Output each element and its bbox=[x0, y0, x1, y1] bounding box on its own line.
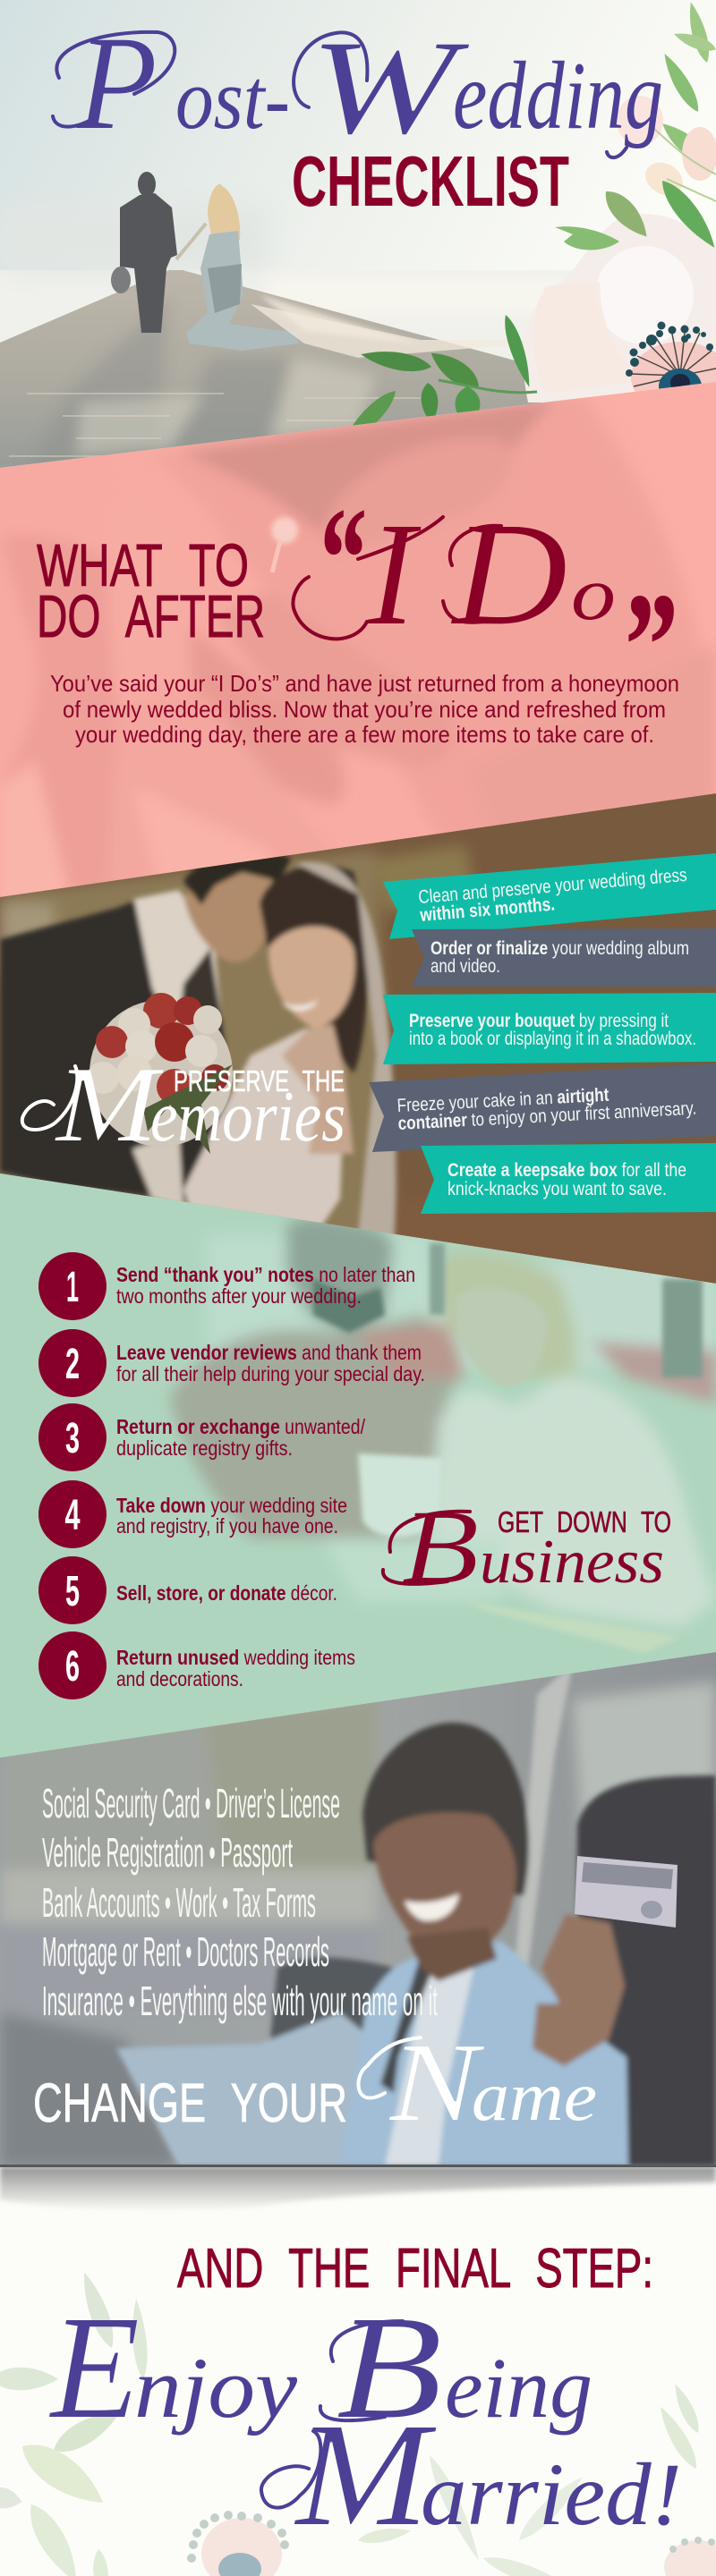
item 4: and registry, if you have one. bbox=[116, 1514, 338, 1538]
ribbon 3: Preserve your bouquet by pressing it bbox=[409, 1011, 669, 1031]
item 4: 4 bbox=[64, 1492, 81, 1539]
title: Post-Wedding bbox=[51, 30, 661, 159]
heading: get down to business: B bbox=[401, 1488, 480, 1606]
groom silhouette bbox=[111, 172, 177, 333]
item 4: Take down your wedding site bbox=[116, 1494, 347, 1517]
id card bbox=[575, 1856, 678, 1928]
heading: I Do script: I bbox=[366, 492, 422, 656]
item 6 bbox=[38, 1631, 355, 1699]
item 5: 5 bbox=[65, 1568, 80, 1615]
heading: get down to business bbox=[381, 1510, 670, 1586]
heading: change your name bbox=[35, 2036, 596, 2123]
checklist items bbox=[38, 1252, 425, 1699]
list of documents: Vehicle Registration • Passport bbox=[42, 1829, 293, 1876]
heading: preserve the memories: PRESERVE THE bbox=[174, 1064, 345, 1097]
closing script: enjoy being married: B bbox=[336, 2285, 443, 2449]
closing script: enjoy being married bbox=[48, 2285, 682, 2556]
heading: I Do script: o bbox=[571, 552, 616, 636]
heading: preserve the memories bbox=[20, 1064, 344, 1141]
heading: what to do after: WHAT TO bbox=[37, 532, 249, 599]
ribbon 3 bbox=[383, 993, 716, 1064]
closing script: enjoy being married: eing bbox=[445, 2340, 592, 2436]
heading: preserve the memories: emories bbox=[150, 1078, 345, 1157]
heading: change your name: N bbox=[388, 2021, 486, 2145]
ribbon 4 bbox=[369, 1063, 716, 1152]
bouquet bbox=[87, 993, 233, 1154]
closing script: enjoy being married: E bbox=[48, 2285, 141, 2449]
icon: anemone flower bbox=[626, 322, 716, 392]
panel: what to do after I do bbox=[0, 376, 716, 912]
couple at table photo bbox=[170, 1217, 716, 1747]
item 3 bbox=[38, 1403, 366, 1471]
item 3: Return or exchange unwanted/ bbox=[116, 1415, 366, 1438]
item 1: 1 bbox=[66, 1264, 79, 1311]
title: Post-Wedding: W bbox=[309, 13, 471, 162]
panel: change your name bbox=[0, 1646, 716, 2174]
item 2 bbox=[38, 1329, 425, 1397]
closing script: enjoy being married: arried! bbox=[421, 2445, 682, 2544]
item 2: Leave vendor reviews and thank them bbox=[116, 1341, 422, 1364]
ribbon 5: Create a keepsake box for all the bbox=[448, 1160, 686, 1181]
item 6: and decorations. bbox=[116, 1667, 243, 1690]
item 4 bbox=[38, 1480, 347, 1548]
ribbon 2: Order or finalize your wedding album bbox=[430, 938, 689, 959]
panel: get down to business bbox=[0, 1163, 716, 1771]
couple photo bbox=[0, 845, 716, 1288]
item 1: two months after your wedding. bbox=[116, 1284, 362, 1308]
panel: preserve the memories bbox=[0, 787, 716, 1288]
intro paragraph: of newly wedded bliss. Now that you’re nice and refreshed from bbox=[63, 696, 666, 723]
large pale flower bbox=[523, 214, 716, 402]
intro paragraph bbox=[50, 670, 679, 748]
pier walkway bbox=[0, 270, 567, 468]
pale anemone flowers bbox=[187, 2511, 716, 2576]
list of documents: Bank Accounts • Work • Tax Forms bbox=[42, 1879, 316, 1926]
ribbon 1 bbox=[383, 853, 716, 939]
item 1: Send “thank you” notes no later than bbox=[116, 1263, 415, 1286]
heading: I Do script bbox=[291, 510, 674, 642]
panel: beach pier photo header bbox=[0, 0, 716, 483]
closing script: enjoy being married: M bbox=[294, 2393, 438, 2556]
item 6: Return unused wedding items bbox=[116, 1646, 355, 1669]
ribbon 4: Freeze your cake in an airtight bbox=[396, 1085, 609, 1116]
title: Post-Wedding: edding bbox=[453, 43, 663, 149]
engagement ring bbox=[271, 517, 298, 572]
heading: get down to business: usiness bbox=[480, 1528, 664, 1597]
panel: final step bbox=[0, 2165, 716, 2576]
closing script: enjoy being married: njoy bbox=[134, 2340, 297, 2436]
ribbon 2 bbox=[412, 928, 716, 987]
item 5: Sell, store, or donate décor. bbox=[116, 1581, 337, 1605]
intro paragraph: your wedding day, there are a few more items to take care of. bbox=[75, 721, 654, 748]
heading: I Do script: “ bbox=[315, 477, 365, 640]
pale foliage background bbox=[0, 2269, 703, 2576]
title: Post-Wedding: P bbox=[75, 9, 158, 157]
heading: I Do script: ” bbox=[618, 562, 676, 730]
heading: what to do after: DO AFTER bbox=[37, 583, 265, 650]
ribbon 5: knick-knacks you want to save. bbox=[448, 1179, 667, 1199]
item 3: 3 bbox=[65, 1415, 80, 1462]
title: Post-Wedding: ost- bbox=[175, 51, 290, 147]
item 2: for all their help during your special day. bbox=[116, 1362, 425, 1385]
list of documents: Mortgage or Rent • Doctors Records bbox=[42, 1928, 329, 1975]
ribbon 1: within six months. bbox=[419, 894, 556, 926]
ribbon 5 bbox=[421, 1143, 716, 1214]
foliage bbox=[337, 0, 716, 451]
heading: preserve the memories: M bbox=[54, 1045, 165, 1164]
hands photo overlay bbox=[0, 394, 716, 903]
item 5 bbox=[38, 1556, 337, 1624]
heading: change your name: CHANGE YOUR bbox=[33, 2072, 347, 2133]
bride figure bbox=[175, 184, 524, 358]
item 1 bbox=[38, 1252, 415, 1320]
heading: what to do after bbox=[36, 544, 263, 638]
ribbon 2: and video. bbox=[430, 956, 500, 977]
item 2: 2 bbox=[65, 1341, 80, 1388]
list of documents bbox=[42, 1780, 438, 2024]
subtitle: CHECKLIST: CHECKLIST bbox=[292, 141, 569, 221]
heading: change your name: ame bbox=[472, 2057, 597, 2135]
item 6: 6 bbox=[65, 1643, 80, 1690]
heading: I Do script: D bbox=[450, 492, 568, 656]
woman in car photo bbox=[0, 1664, 716, 2166]
item 3: duplicate registry gifts. bbox=[116, 1436, 293, 1460]
